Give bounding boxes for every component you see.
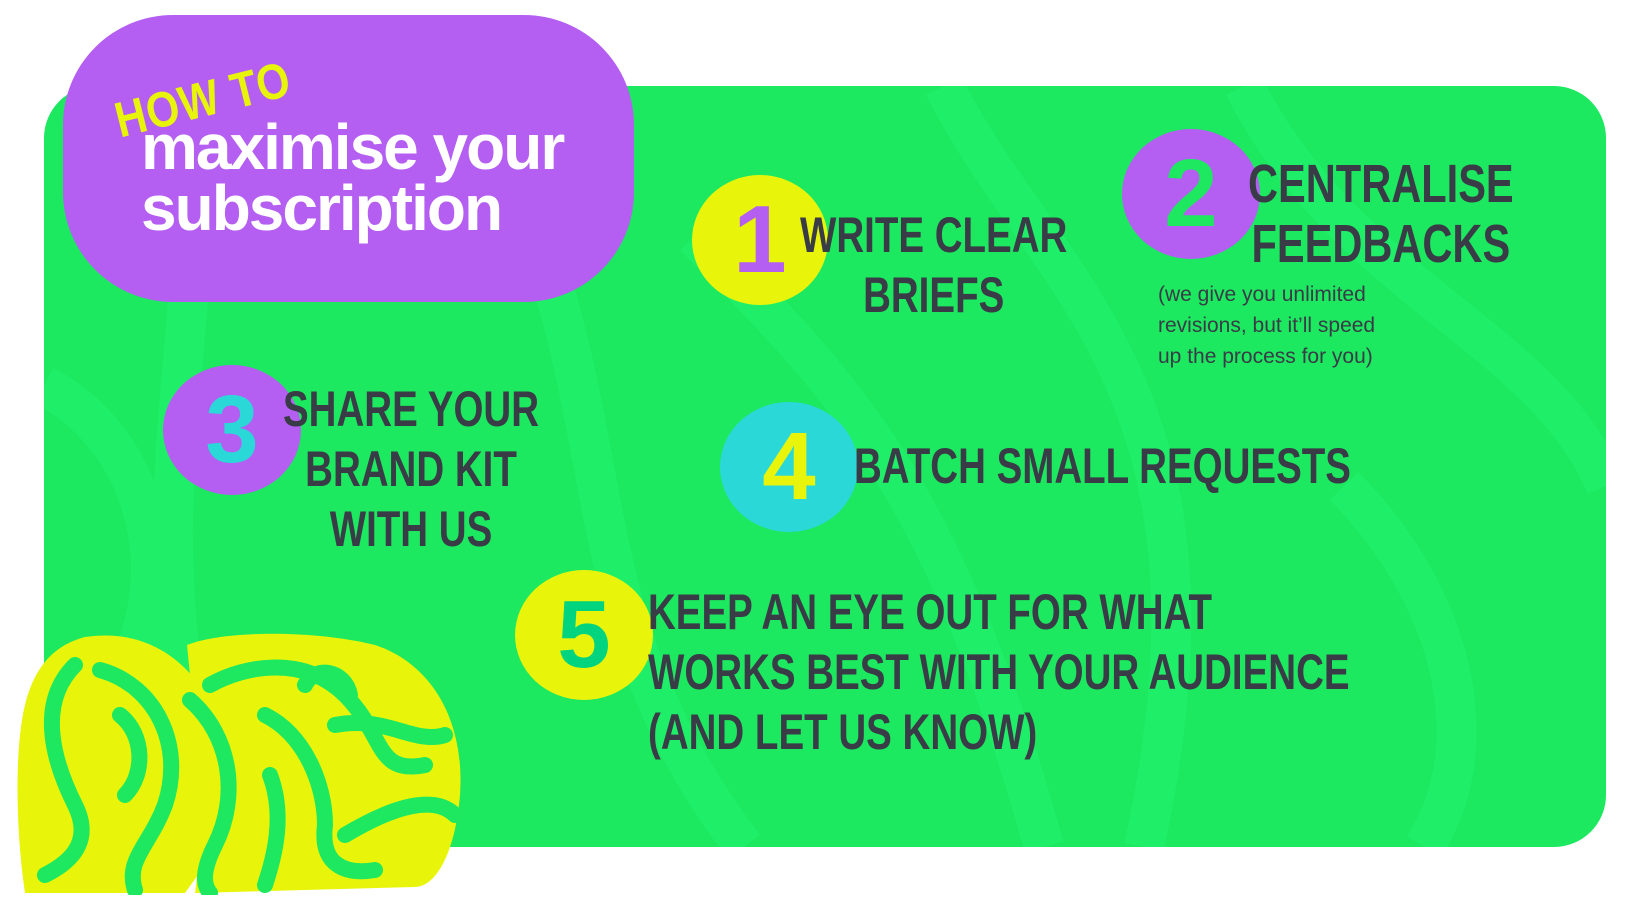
note text <box>1158 283 1375 368</box>
title text: maximise your <box>141 111 563 183</box>
icon: number 5 <box>515 570 653 700</box>
icon: number 1 <box>692 175 828 305</box>
icon: number 3: 3 <box>205 376 259 483</box>
icon: number 5: 5 <box>557 581 611 688</box>
text: keep an eye out: KEEP AN EYE OUT FOR WHAT <box>648 584 1212 640</box>
note text: up the process for you) <box>1158 345 1373 368</box>
note text: (we give you unlimited <box>1158 283 1366 306</box>
text: keep an eye out: WORKS BEST WITH YOUR AUDIENCE <box>648 644 1350 700</box>
text: keep an eye out: (AND LET US KNOW) <box>648 704 1037 760</box>
text: centralise feedbacks <box>1248 154 1514 274</box>
text: share your brand kit: SHARE YOUR <box>283 381 539 437</box>
text: keep an eye out <box>648 584 1350 760</box>
text: share your brand kit <box>283 381 539 557</box>
title text: subscription <box>141 172 501 244</box>
text: write clear briefs: WRITE CLEAR <box>800 207 1067 263</box>
text: write clear briefs: BRIEFS <box>863 267 1004 323</box>
icon: number 3 <box>163 365 301 495</box>
step 5 <box>515 570 1350 760</box>
how to label: HOW TO <box>109 51 297 148</box>
icon: number 4 <box>720 402 858 532</box>
title text <box>141 111 564 244</box>
step 3 <box>163 365 539 557</box>
text: centralise feedbacks: FEEDBACKS <box>1251 214 1510 274</box>
decorative yellow blob <box>18 634 461 895</box>
title box <box>63 15 634 302</box>
text: share your brand kit: WITH US <box>330 501 492 557</box>
icon: number 1: 1 <box>733 186 787 293</box>
icon: number 4: 4 <box>762 413 816 520</box>
step 1 <box>692 175 1067 323</box>
text: share your brand kit: BRAND KIT <box>305 441 517 497</box>
note text: revisions, but it’ll speed <box>1158 314 1375 337</box>
step 2 <box>1122 129 1514 368</box>
text: write clear briefs <box>800 207 1067 323</box>
icon: number 2: 2 <box>1164 140 1218 247</box>
text: batch small requests: BATCH SMALL REQUESTS <box>854 438 1351 494</box>
icon: number 2 <box>1122 129 1260 259</box>
text: centralise feedbacks: CENTRALISE <box>1248 154 1514 214</box>
step 4 <box>720 402 1351 532</box>
